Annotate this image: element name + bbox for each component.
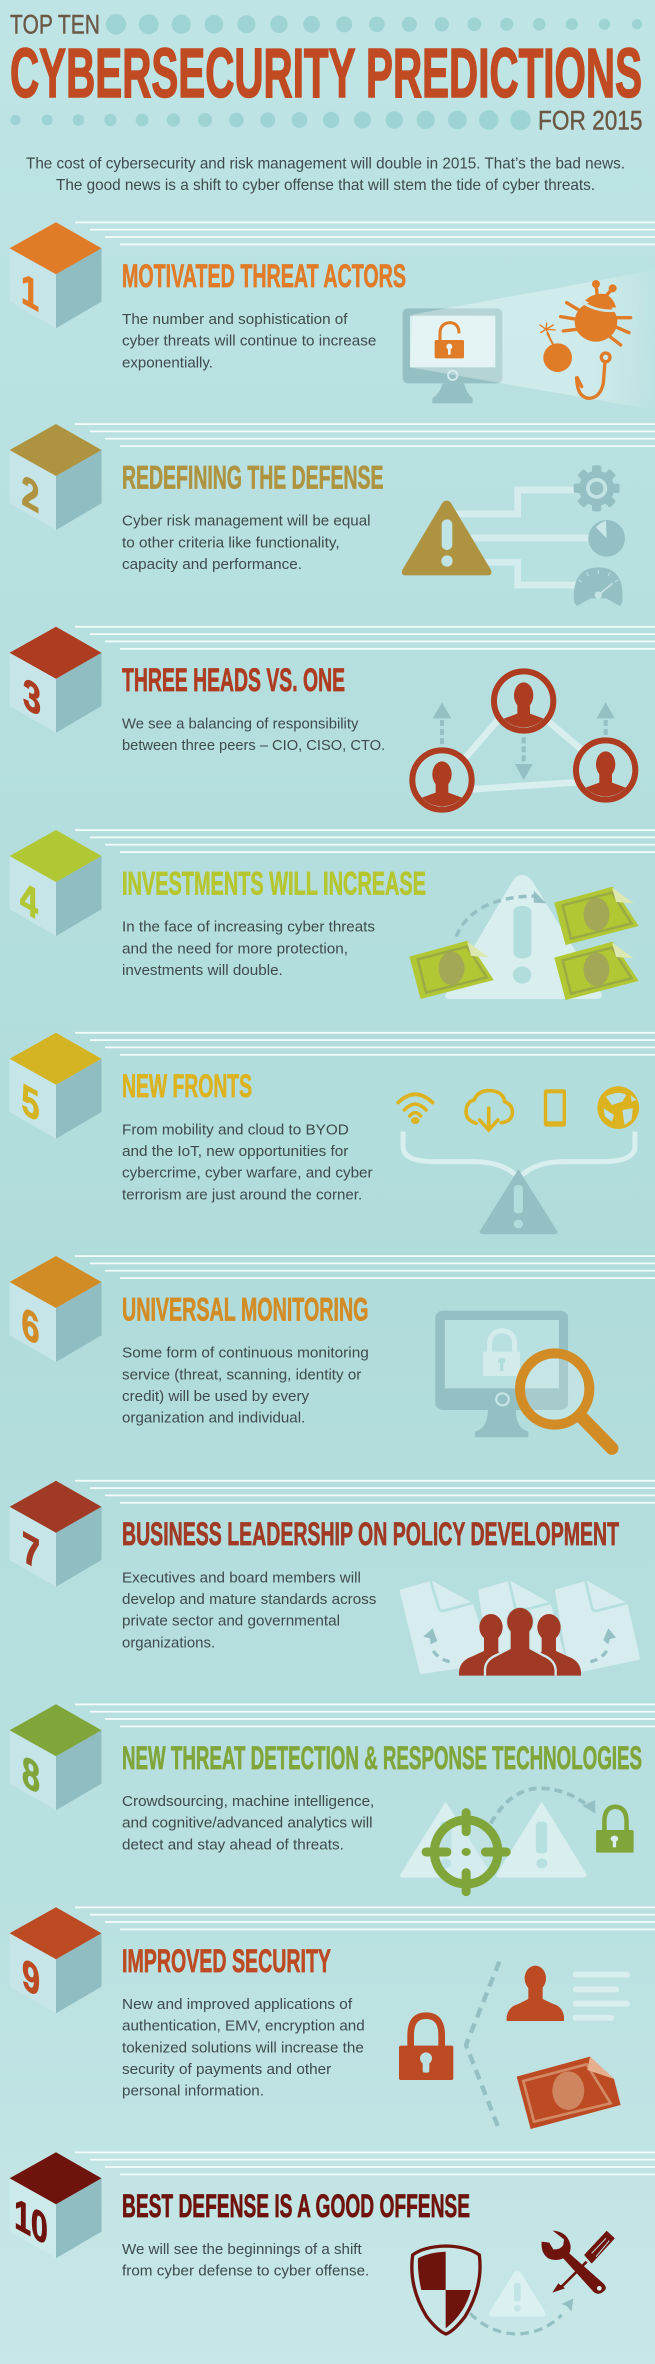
panel: prediction 8 xyxy=(10,1704,655,1892)
cube: number 7 xyxy=(10,1481,102,1587)
icon: monitor with threats xyxy=(403,270,655,410)
cube: number 4: 4 xyxy=(20,872,39,930)
cube: number 4 xyxy=(10,830,102,936)
cube: number 10: 10 xyxy=(14,2189,48,2256)
intro text xyxy=(26,155,625,194)
cube: number 2: 2 xyxy=(22,466,39,523)
cube: number 3 xyxy=(10,627,102,733)
heading: NEW FRONTS xyxy=(122,1068,252,1104)
body text: Crowdsourcing, machine intelligence, xyxy=(122,1794,374,1810)
icon: warning connected to gear, pie and gauge xyxy=(402,465,625,606)
body text: and the IoT, new opportunities for xyxy=(122,1144,349,1160)
body text: service (threat, scanning, identity or xyxy=(122,1367,361,1383)
body text: The number and sophistication of xyxy=(122,312,349,328)
panel: prediction 4 xyxy=(10,829,655,1000)
heading: THREE HEADS VS. ONE xyxy=(122,662,345,698)
heading: IMPROVED SECURITY xyxy=(122,1943,331,1979)
body text xyxy=(122,716,385,754)
heading: top ten: TOP TEN xyxy=(10,9,100,39)
body text xyxy=(122,1122,373,1203)
cube: number 8 xyxy=(10,1704,102,1810)
header: title block xyxy=(10,9,642,135)
body text: Cyber risk management will be equal xyxy=(122,514,370,530)
dots row top xyxy=(106,14,642,35)
cube: number 9 xyxy=(10,1907,102,2013)
body text: In the face of increasing cyber threats xyxy=(122,920,375,936)
body text: From mobility and cloud to BYOD xyxy=(122,1122,349,1138)
icon: three peers network xyxy=(412,671,635,810)
panel: prediction 9 xyxy=(10,1906,655,2130)
heading: INVESTMENTS WILL INCREASE xyxy=(122,866,426,902)
cube: number 2 xyxy=(10,424,102,530)
body text: tokenized solutions will increase the xyxy=(122,2040,364,2056)
body text: Executives and board members will xyxy=(122,1570,361,1586)
body text: between three peers – CIO, CISO, CTO. xyxy=(122,738,385,754)
icon: shield, warning and tools xyxy=(412,2231,614,2334)
body text: and cognitive/advanced analytics will xyxy=(122,1816,373,1832)
body text: Some form of continuous monitoring xyxy=(122,1346,369,1362)
body text: authentication, EMV, encryption and xyxy=(122,2019,365,2035)
body text: personal information. xyxy=(122,2084,264,2100)
body text: terrorism are just around the corner. xyxy=(122,1187,362,1203)
cube: number 10 xyxy=(10,2152,102,2258)
cube: number 3: 3 xyxy=(23,669,41,726)
body text: We see a balancing of responsibility xyxy=(122,716,359,732)
cube: number 1 xyxy=(10,222,102,328)
panel: prediction 5 xyxy=(10,1032,655,1234)
body text: We will see the beginnings of a shift xyxy=(122,2242,362,2258)
body text: organizations. xyxy=(122,1635,215,1651)
panel: prediction 10 xyxy=(10,2152,655,2334)
intro text: The good news is a shift to cyber offense that will stem the tide of cyber threats. xyxy=(56,177,595,194)
body text: organization and individual. xyxy=(122,1411,305,1427)
body text xyxy=(122,514,370,573)
cube: number 5: 5 xyxy=(22,1075,39,1132)
icon: lock, person and payment xyxy=(399,1962,630,2130)
body text xyxy=(122,312,376,371)
body text xyxy=(122,920,375,979)
icon: monitor and magnifier xyxy=(435,1311,612,1448)
body text: detect and stay ahead of threats. xyxy=(122,1837,344,1853)
cube: number 6: 6 xyxy=(22,1298,39,1355)
body text: security of payments and other xyxy=(122,2062,331,2078)
body text xyxy=(122,1997,365,2100)
body text: credit) will be used by every xyxy=(122,1389,310,1405)
body text: capacity and performance. xyxy=(122,557,302,573)
cube: number 7: 7 xyxy=(22,1523,40,1580)
body text: develop and mature standards across xyxy=(122,1592,376,1608)
icon: documents and leaders xyxy=(401,1581,638,1676)
body text: to other criteria like functionality, xyxy=(122,535,340,551)
icon: crosshair over warnings to lock xyxy=(400,1788,634,1892)
body text: New and improved applications of xyxy=(122,1997,353,2013)
body text xyxy=(122,1570,376,1651)
body text: investments will double. xyxy=(122,963,283,979)
icon: person left xyxy=(412,750,472,810)
icon: wifi, cloud, phone, globe to warning xyxy=(398,1086,639,1234)
body text: exponentially. xyxy=(122,355,213,371)
cube: number 9: 9 xyxy=(22,1950,40,2007)
icon: person right xyxy=(576,740,635,800)
panel: prediction 1 xyxy=(10,222,655,410)
cube: number 5 xyxy=(10,1033,102,1139)
cube: number 6 xyxy=(10,1256,102,1362)
dots row bottom xyxy=(10,110,531,130)
body text: cybercrime, cyber warfare, and cyber xyxy=(122,1166,373,1182)
body text xyxy=(122,1794,374,1853)
heading: UNIVERSAL MONITORING xyxy=(122,1292,368,1328)
panel: prediction 6 xyxy=(10,1255,655,1448)
body text xyxy=(122,2242,369,2280)
panel: prediction 7 xyxy=(10,1480,655,1676)
panel: prediction 3 xyxy=(10,626,655,810)
intro text: The cost of cybersecurity and risk management will double in 2015. That’s the bad news. xyxy=(26,155,625,172)
heading: REDEFINING THE DEFENSE xyxy=(122,460,384,496)
panel: prediction 2 xyxy=(10,423,655,606)
icon: person top xyxy=(494,671,553,731)
body text: private sector and governmental xyxy=(122,1614,340,1630)
icon: warning with money bills xyxy=(409,875,639,1000)
body text: cyber threats will continue to increase xyxy=(122,334,376,350)
heading: MOTIVATED THREAT ACTORS xyxy=(122,258,406,294)
cube: number 1: 1 xyxy=(21,264,39,322)
body text: from cyber defense to cyber offense. xyxy=(122,2264,369,2280)
body text xyxy=(122,1346,369,1427)
body text: and the need for more protection, xyxy=(122,941,348,957)
cube: number 8: 8 xyxy=(22,1747,40,1804)
